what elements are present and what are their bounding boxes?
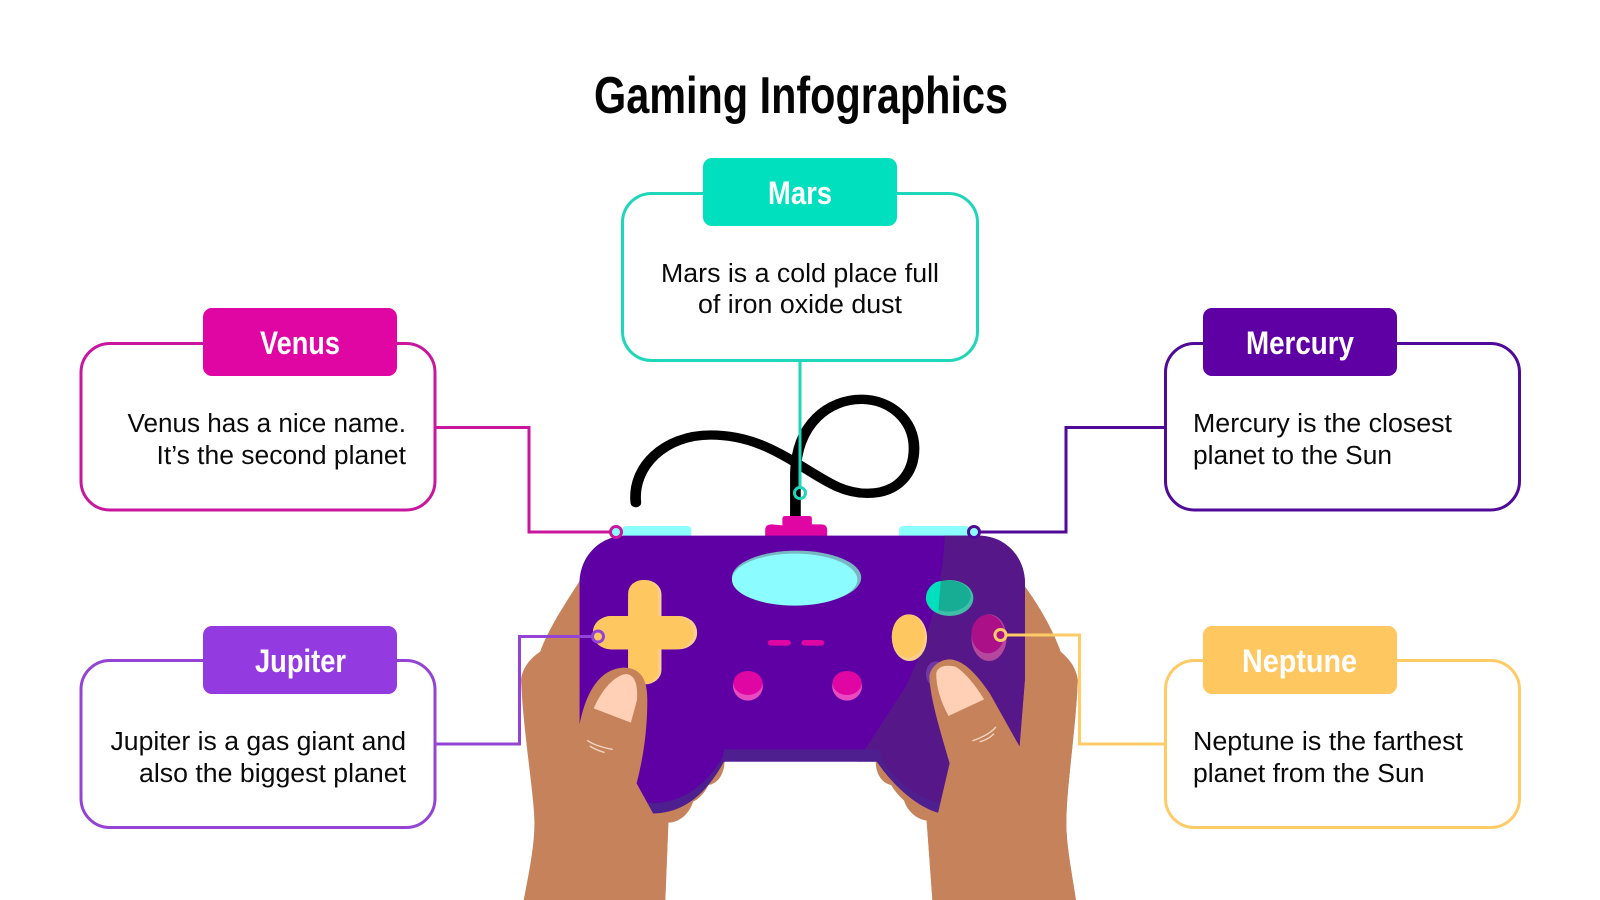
Mercury heading: Mercury (1246, 325, 1354, 361)
left thumb (538, 668, 668, 900)
panel: Mercury (968, 308, 1520, 538)
Jupiter heading: Jupiter (255, 643, 346, 679)
cable (636, 399, 914, 517)
Venus text: Venus has a nice name. (128, 410, 406, 438)
cable connector (765, 516, 827, 537)
Neptune box (1166, 660, 1520, 828)
Neptune heading: Neptune (1242, 643, 1357, 679)
Mars heading: Mars (768, 175, 832, 211)
Mercury box (1166, 344, 1520, 510)
Neptune tab (1203, 626, 1397, 694)
Venus connector (435, 428, 622, 538)
Mars text: Mars is a cold place full (661, 260, 939, 288)
Mercury connector (968, 428, 1165, 538)
Venus text: It’s the second planet (156, 442, 406, 470)
magenta right button (971, 614, 1007, 661)
Mercury tab (1203, 308, 1397, 376)
shoulder buttons (622, 526, 970, 537)
left hand back (521, 580, 725, 900)
yellow button (892, 614, 927, 661)
hidden button behind thumb (926, 661, 947, 687)
panel: Jupiter (81, 626, 604, 828)
Mars tab (703, 158, 897, 226)
Neptune text: planet from the Sun (1193, 760, 1424, 788)
Jupiter text: Jupiter is a gas giant and (110, 728, 406, 756)
Neptune text: Neptune is the farthest (1193, 728, 1463, 756)
Jupiter tab (203, 626, 397, 694)
Mercury text: Mercury is the closest (1193, 410, 1452, 438)
Mars text: of iron oxide dust (698, 291, 902, 319)
right knuckle lines (973, 727, 996, 742)
Neptune connector (995, 630, 1165, 744)
Venus box (81, 344, 435, 510)
title: Gaming Infographics (594, 67, 1008, 125)
right thumbnail (936, 666, 984, 716)
Jupiter connector (435, 631, 604, 744)
panel: Neptune (995, 626, 1520, 828)
left knuckle lines (588, 741, 612, 752)
green button (926, 580, 973, 616)
Jupiter text: also the biggest planet (139, 760, 406, 788)
left thumbnail (594, 674, 637, 723)
panel: Venus (81, 308, 622, 538)
Jupiter box (81, 660, 435, 828)
illustration: hands holding game controller (521, 399, 1078, 900)
right thumb (927, 587, 1078, 900)
magenta buttons (733, 671, 862, 701)
Mars connector (794, 360, 806, 498)
controller shaded side (647, 533, 1036, 820)
controller body (580, 536, 1025, 813)
right hand back (876, 587, 1078, 900)
Mars box (622, 194, 978, 360)
Venus heading: Venus (260, 325, 340, 361)
Venus tab (203, 308, 397, 376)
Mercury text: planet to the Sun (1193, 442, 1392, 470)
small dashes (768, 640, 824, 646)
panel: Mars (622, 158, 978, 498)
screen (732, 551, 861, 606)
d-pad (593, 580, 697, 684)
